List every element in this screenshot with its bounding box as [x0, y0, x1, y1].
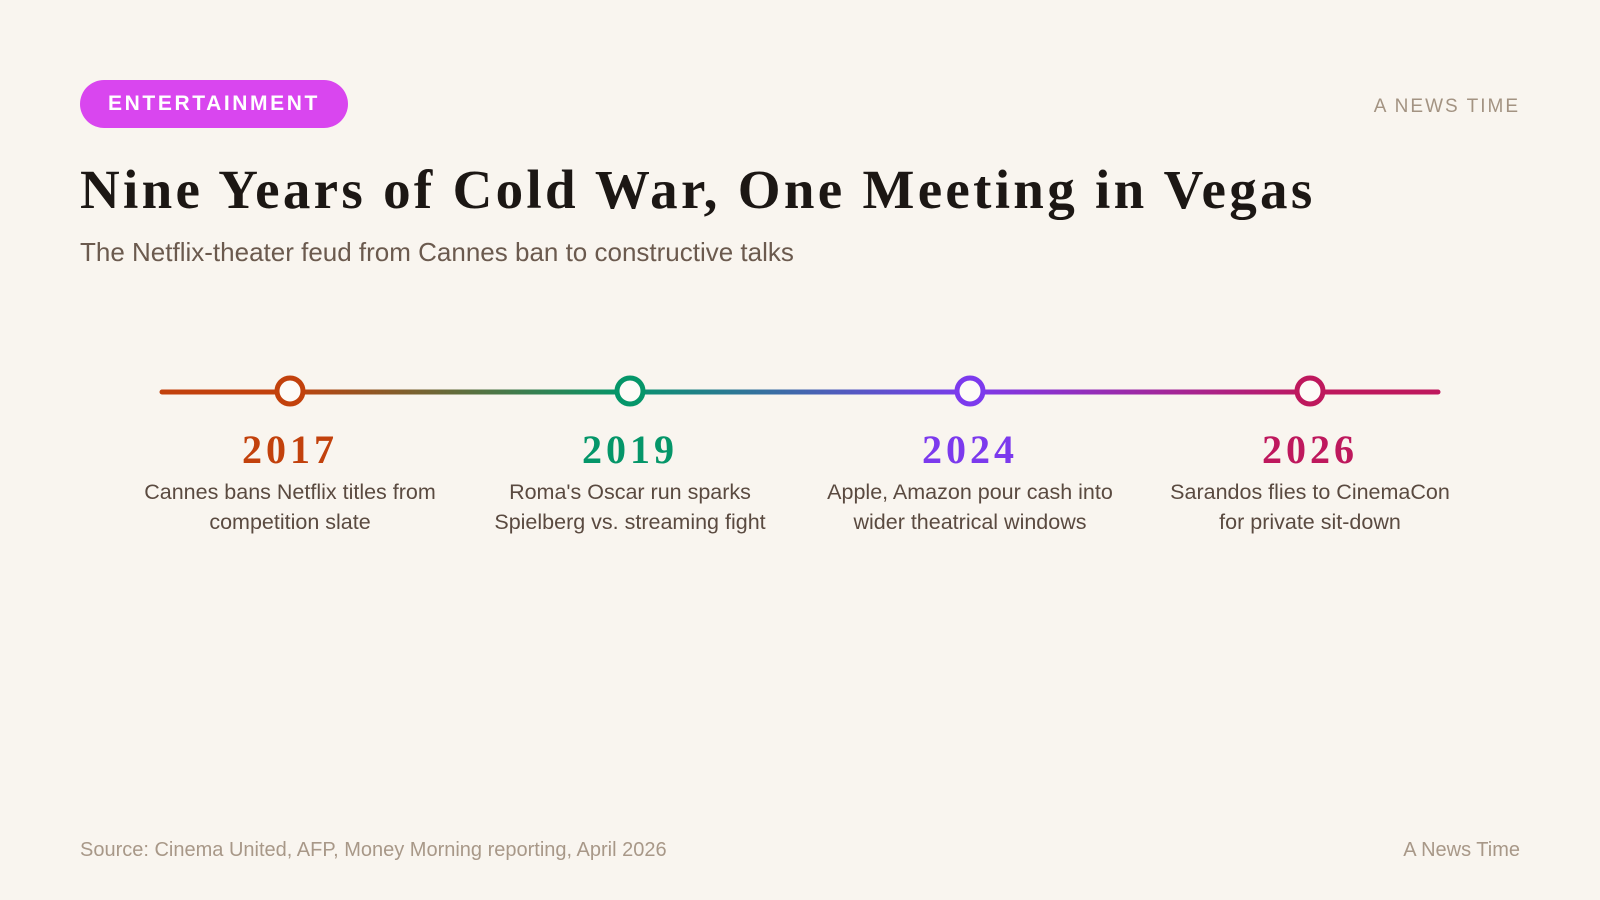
- event 2017: Cannes bans Netflix titles from competition slate: [144, 480, 436, 534]
- footer brand: A News Time: [1403, 839, 1520, 861]
- event 2017: 2017: [242, 427, 338, 472]
- title: Nine Years of Cold War, One Meeting in Vegas: [80, 159, 1316, 220]
- event 2017: [144, 427, 436, 534]
- category pill: ENTERTAINMENT: [108, 92, 320, 115]
- event 2019: Roma's Oscar run sparks Spielberg vs. streaming fight: [494, 480, 766, 534]
- event 2019: [494, 427, 766, 534]
- event 2019: 2019: [582, 427, 678, 472]
- event 2024: [827, 427, 1113, 534]
- brand label: A NEWS TIME: [1374, 96, 1520, 117]
- event 2026: [1170, 427, 1450, 534]
- subtitle: The Netflix-theater feud from Cannes ban to constructive talks: [80, 237, 794, 267]
- event 2026: Sarandos flies to CinemaCon for private sit-down: [1170, 480, 1450, 534]
- source footer: Source: Cinema United, AFP, Money Morning reporting, April 2026: [80, 839, 667, 861]
- event 2024: 2024: [922, 427, 1018, 472]
- event 2026: 2026: [1262, 427, 1358, 472]
- event 2024: Apple, Amazon pour cash into wider theatrical windows: [827, 480, 1113, 534]
- category pill: [80, 80, 348, 128]
